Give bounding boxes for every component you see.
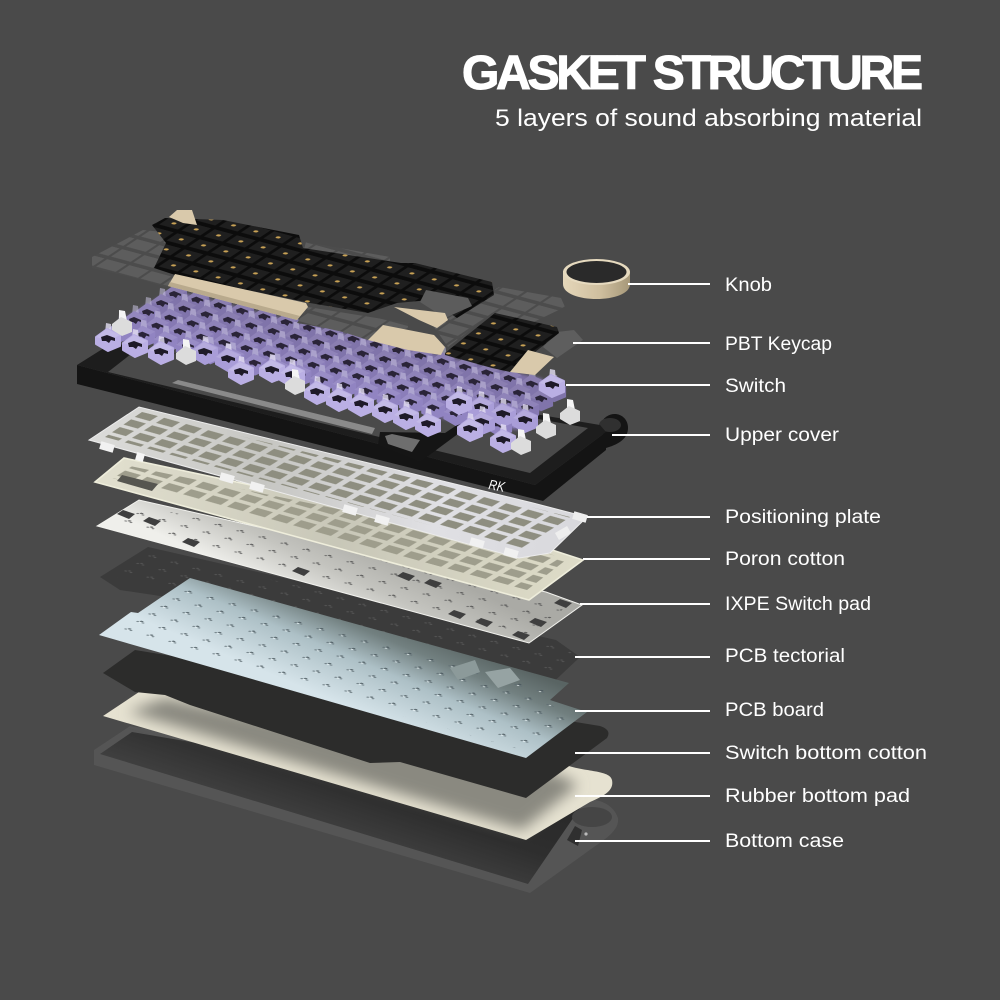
label: PCB board: PCB board [725, 700, 824, 721]
title: GASKET STRUCTURE [462, 47, 923, 100]
layer: switches [96, 279, 580, 455]
layer: upper cover [77, 343, 628, 501]
label: PBT Keycap: PBT Keycap [725, 334, 832, 355]
layer: IXPE switch pad [97, 500, 582, 643]
label: Positioning plate: Positioning plate [725, 507, 881, 528]
label: PCB tectorial: PCB tectorial [725, 646, 845, 667]
label: Bottom case: Bottom case [725, 831, 844, 852]
brand logo: RK [487, 476, 507, 495]
icon: knob [563, 259, 630, 299]
subtitle: 5 layers of sound absorbing material [495, 105, 922, 132]
layer: PCB board [99, 578, 587, 758]
layer: PCB tectorial [100, 547, 580, 690]
label: Switch: Switch [725, 376, 786, 397]
layer: poron cotton [95, 458, 583, 600]
layer: PBT keycaps [92, 210, 583, 375]
layer: switch bottom cotton [103, 650, 608, 798]
label: Rubber bottom pad: Rubber bottom pad [725, 786, 910, 807]
label: Knob: Knob [725, 275, 772, 296]
layer: rubber bottom pad [103, 690, 612, 840]
layer: bottom case [94, 726, 618, 893]
label: Poron cotton: Poron cotton [725, 549, 845, 570]
label: Switch bottom cotton: Switch bottom cotton [725, 743, 927, 764]
layer: positioning plate [89, 407, 588, 559]
label: Upper cover: Upper cover [725, 425, 840, 446]
label: IXPE Switch pad: IXPE Switch pad [725, 594, 871, 615]
